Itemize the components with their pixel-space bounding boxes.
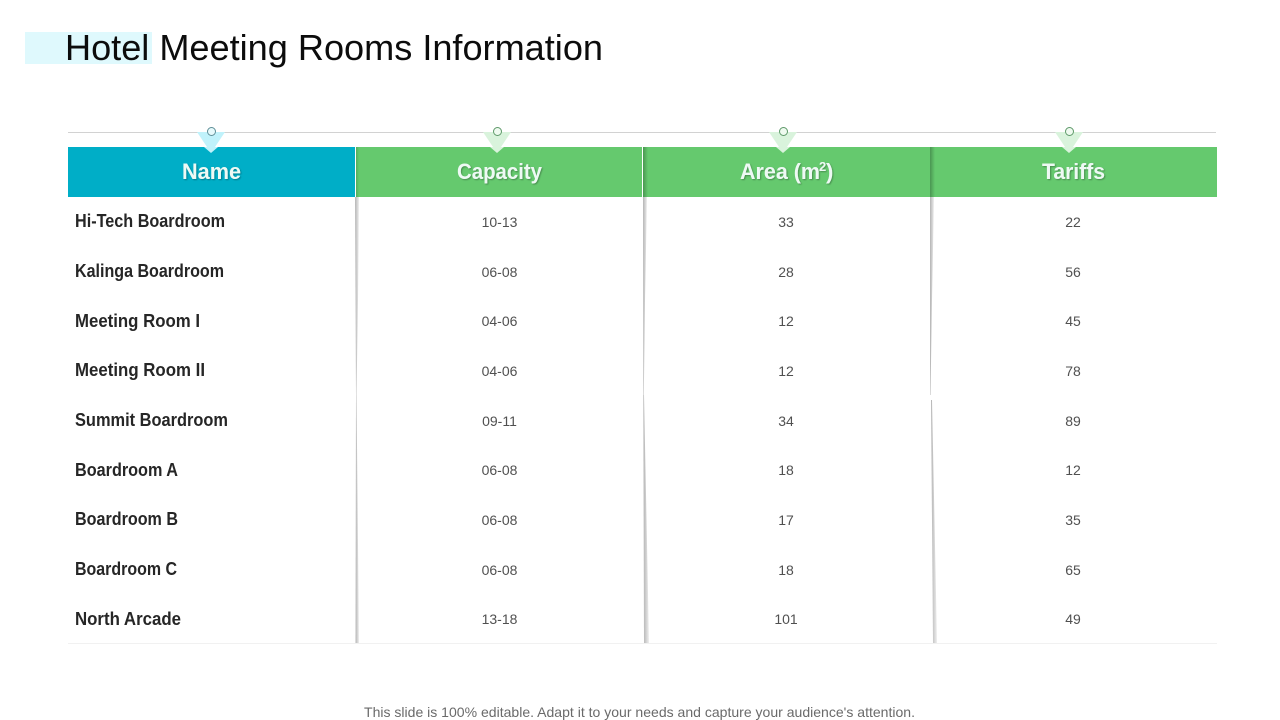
tariffs column: 56 — [1065, 264, 1081, 280]
title: Hotel Meeting Rooms Information — [65, 27, 603, 68]
capacity column: 04-06 — [482, 313, 518, 329]
header: area — [643, 147, 930, 197]
room names column: Boardroom A — [75, 460, 178, 480]
room names column: North Arcade — [75, 609, 181, 629]
table header — [68, 147, 1217, 197]
capacity column: 06-08 — [482, 264, 518, 280]
capacity column: 04-06 — [482, 363, 518, 379]
room names column: Meeting Room I — [75, 311, 200, 331]
icon: pin area — [769, 128, 797, 153]
top rule with pins — [68, 128, 1216, 153]
tariffs column: 65 — [1065, 562, 1081, 578]
capacity column: 06-08 — [482, 562, 518, 578]
tariffs column: 35 — [1065, 512, 1081, 528]
room names column: Meeting Room II — [75, 360, 205, 380]
header: area: Area (m — [740, 159, 820, 184]
tariffs column: 45 — [1065, 313, 1081, 329]
area column: 28 — [778, 264, 794, 280]
header: name: Name — [182, 159, 241, 184]
tariffs column: 78 — [1065, 363, 1081, 379]
capacity column: 06-08 — [482, 462, 518, 478]
capacity column: 13-18 — [482, 611, 518, 627]
area column: 18 — [778, 462, 794, 478]
header: area: ) — [826, 159, 833, 184]
area column: 12 — [778, 363, 794, 379]
header: tariffs — [930, 147, 1217, 197]
area column: 18 — [778, 562, 794, 578]
header: tariffs: Tariffs — [1042, 159, 1105, 184]
capacity column: 06-08 — [482, 512, 518, 528]
area column: 33 — [778, 214, 794, 230]
tariffs column: 49 — [1065, 611, 1081, 627]
tariffs column: 89 — [1065, 413, 1081, 429]
capacity column — [482, 214, 518, 627]
tariffs column: 12 — [1065, 462, 1081, 478]
tariffs column — [1065, 214, 1081, 627]
room names column: Summit Boardroom — [75, 410, 228, 430]
column shadow dividers — [68, 197, 1217, 644]
capacity column: 09-11 — [482, 413, 517, 429]
area column: 12 — [778, 313, 794, 329]
header: capacity: Capacity — [457, 159, 543, 184]
tariffs column: 22 — [1065, 214, 1081, 230]
room names column: Boardroom C — [75, 559, 177, 579]
room names column: Hi-Tech Boardroom — [75, 211, 225, 231]
room names column — [75, 211, 228, 629]
icon: pin capacity — [483, 128, 511, 153]
room names column: Boardroom B — [75, 509, 178, 529]
icon: pin name — [197, 128, 225, 153]
area column: 17 — [778, 512, 794, 528]
header: capacity — [356, 147, 642, 197]
room names column: Kalinga Boardroom — [75, 261, 224, 281]
capacity column: 10-13 — [482, 214, 518, 230]
area column: 101 — [774, 611, 798, 627]
icon: pin tariffs — [1055, 128, 1083, 153]
header: name — [68, 147, 355, 197]
area column — [774, 214, 798, 627]
footer note: This slide is 100% editable. Adapt it to your needs and capture your audience's attention. — [364, 704, 915, 720]
area column: 34 — [778, 413, 794, 429]
header: area: 2 — [819, 159, 826, 174]
